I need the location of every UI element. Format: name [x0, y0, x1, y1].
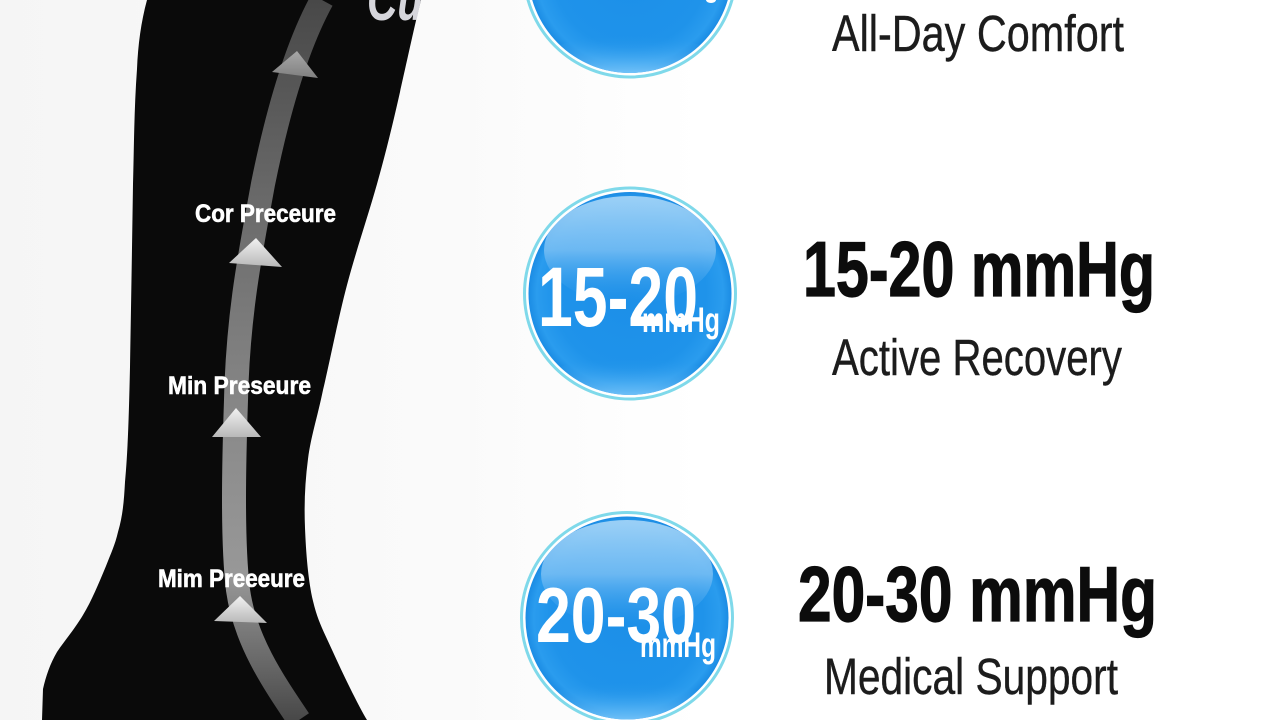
text: medical support: Medical Support: [824, 648, 1118, 705]
badge: top level (cropped): [524, 0, 736, 77]
arrow: top: [272, 51, 318, 78]
arrow: upper: [229, 238, 282, 267]
badge: 20-30 mmHg: [522, 512, 732, 720]
badge unit: mmHg: [642, 301, 720, 340]
arrow: lower: [214, 596, 267, 623]
label: middle pressure: Min Preseure: [168, 372, 311, 400]
compression sock illustration: [42, 0, 423, 720]
text: all-day comfort: All-Day Comfort: [832, 5, 1124, 62]
badge number: 15-20: [538, 250, 698, 344]
heading: 20-30 mmHg: 20-30 mmHg: [798, 550, 1157, 638]
arrow: middle: [212, 408, 261, 437]
sock silhouette: [42, 0, 421, 720]
badge number: 20-30: [536, 571, 696, 659]
label: lower pressure: Mim Preeeure: [158, 565, 305, 593]
badge: 15-20 mmHg: [524, 188, 736, 399]
text: active recovery: Active Recovery: [832, 329, 1122, 386]
pressure flow band: [234, 0, 322, 720]
badge unit: mmHg: [640, 626, 716, 665]
heading: 15-20 mmHg: 15-20 mmHg: [803, 225, 1155, 313]
label: upper pressure: Cor Preceure: [195, 200, 336, 228]
